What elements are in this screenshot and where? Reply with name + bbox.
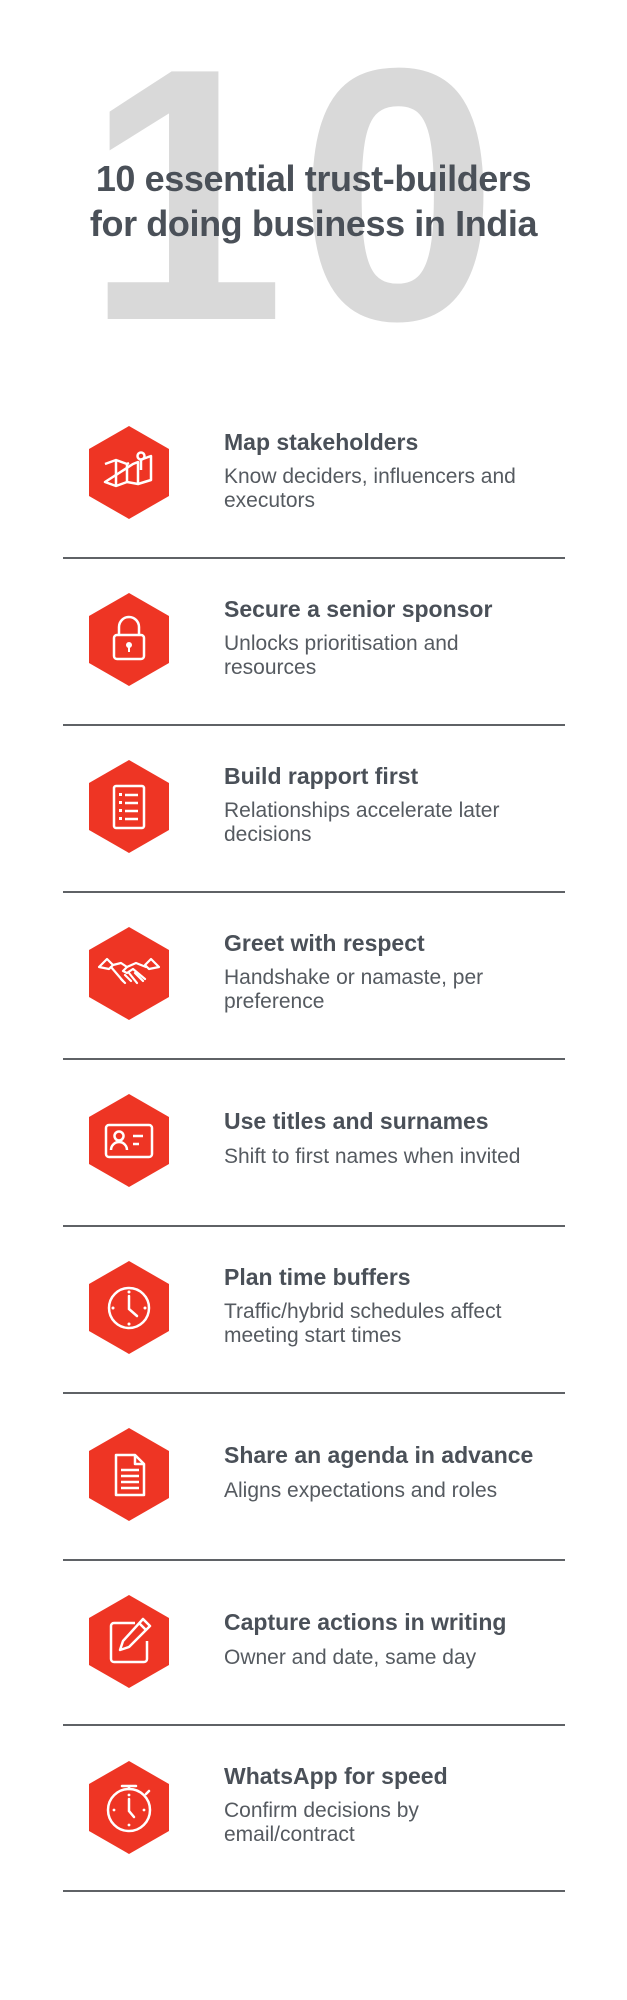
- item 2 title: Secure a senior sponsor: [224, 596, 492, 622]
- item 7 title: Share an agenda in advance: [224, 1442, 533, 1468]
- item 1 title: Map stakeholders: [224, 429, 418, 455]
- item 3 title: Build rapport first: [224, 763, 418, 789]
- item 7 description: Aligns expectations and roles: [224, 1479, 497, 1502]
- big background number: [85, 0, 498, 396]
- item 4 icon: handshake: [89, 927, 169, 1020]
- big background number: 1: [85, 0, 285, 396]
- item 6 title: Plan time buffers: [224, 1264, 411, 1290]
- item 8 description: Owner and date, same day: [224, 1646, 476, 1669]
- item 8 icon: edit: [89, 1595, 169, 1688]
- item 5 title: Use titles and surnames: [224, 1108, 489, 1134]
- item 1 icon: map: [89, 426, 169, 519]
- title: [90, 158, 538, 244]
- item 4 description: Handshake or namaste, per preference: [224, 966, 483, 1013]
- title: 10 essential trust-builders: [96, 158, 531, 199]
- item 8 title: Capture actions in writing: [224, 1609, 506, 1635]
- item 6 icon: clock: [89, 1261, 169, 1354]
- item 9 description: Confirm decisions by email/contract: [224, 1799, 419, 1846]
- item 9 icon: stopwatch: [89, 1761, 169, 1854]
- item 6 description: Traffic/hybrid schedules affect meeting start times: [224, 1300, 501, 1347]
- item 3 icon: checklist: [89, 760, 169, 853]
- item 2 description: Unlocks prioritisation and resources: [224, 632, 459, 679]
- item 4 title: Greet with respect: [224, 930, 425, 956]
- item 5 icon: id card: [89, 1094, 169, 1187]
- item 5 description: Shift to first names when invited: [224, 1145, 520, 1168]
- big background number: 0: [298, 0, 498, 396]
- item 9 title: WhatsApp for speed: [224, 1763, 448, 1789]
- item 1 description: Know deciders, influencers and executors: [224, 465, 516, 512]
- item 3 description: Relationships accelerate later decisions: [224, 799, 499, 846]
- title: for doing business in India: [90, 203, 537, 244]
- item 7 icon: document: [89, 1428, 169, 1521]
- item 2 icon: lock: [89, 593, 169, 686]
